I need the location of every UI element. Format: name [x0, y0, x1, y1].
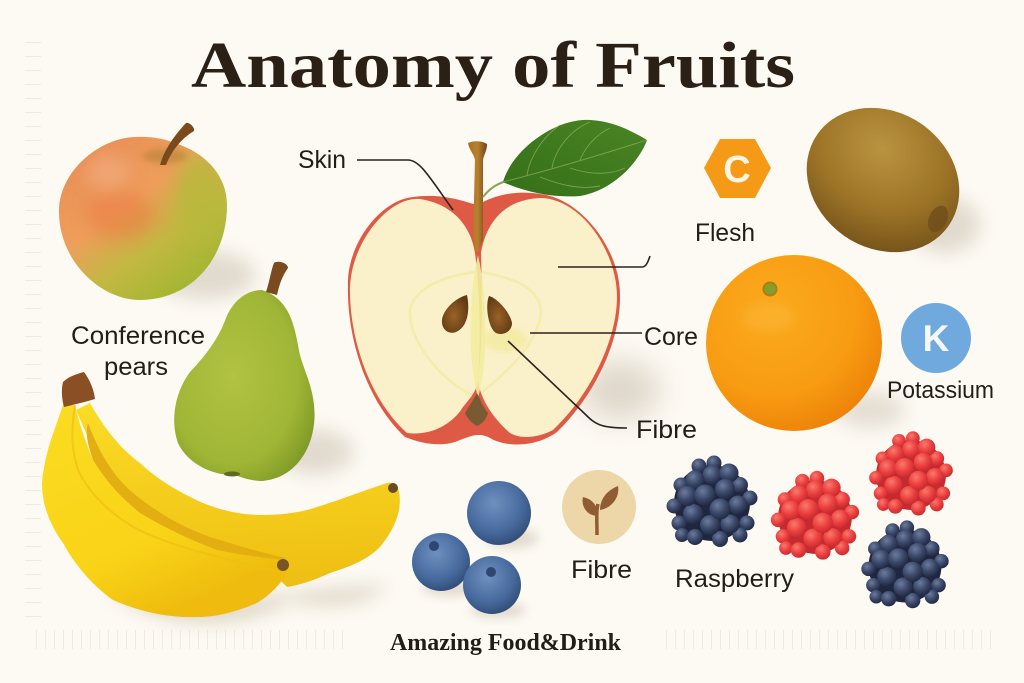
label: potassium: Potassium [887, 377, 994, 404]
illustration: raspberry centre [771, 471, 859, 560]
seed right [487, 296, 512, 334]
apple stem [468, 141, 487, 254]
illustration: bananas [42, 372, 400, 621]
apple flesh left [350, 199, 480, 433]
core outline [410, 272, 541, 395]
leaf [503, 120, 647, 196]
callout: flesh [558, 219, 755, 267]
illustration: blackberry right [861, 520, 949, 608]
apple calyx [465, 393, 488, 426]
illustration: blackberry left [666, 456, 758, 547]
label: conference pears: Conference [71, 322, 205, 350]
callout: skin: Skin [298, 146, 346, 174]
icon: vitamin C hexagon [704, 139, 771, 198]
icon: potassium K circle [901, 303, 971, 373]
label: fibre: Fibre [571, 556, 632, 584]
title: Anatomy of Fruits [191, 29, 795, 102]
icon: potassium K circle: K [923, 318, 950, 359]
illustration: apple half cross-section [348, 120, 660, 444]
illustration: blueberries [412, 481, 538, 618]
footer brand: Amazing Food&Drink [390, 630, 622, 656]
leaf stalk [483, 181, 506, 197]
callout: core: Core [644, 323, 698, 351]
label: conference pears: pears [104, 353, 168, 381]
seed left [442, 295, 468, 333]
illustration: pear [174, 262, 353, 481]
icon: fibre leaf sprout [562, 470, 636, 544]
callout: skin [298, 146, 453, 210]
illustration: orange [706, 255, 905, 431]
illustration: raspberry right [869, 431, 953, 515]
illustration: whole apple [55, 123, 255, 305]
icon: vitamin C hexagon: C [723, 149, 751, 191]
callout: fibre: Fibre [636, 416, 697, 444]
apple flesh right [478, 198, 617, 437]
callout: flesh: Flesh [695, 219, 755, 247]
apple skin [348, 193, 620, 444]
illustration: kiwi [778, 78, 988, 282]
callout: fibre [508, 341, 697, 444]
label: conference pears [71, 322, 205, 381]
label: raspberry: Raspberry [675, 565, 795, 593]
